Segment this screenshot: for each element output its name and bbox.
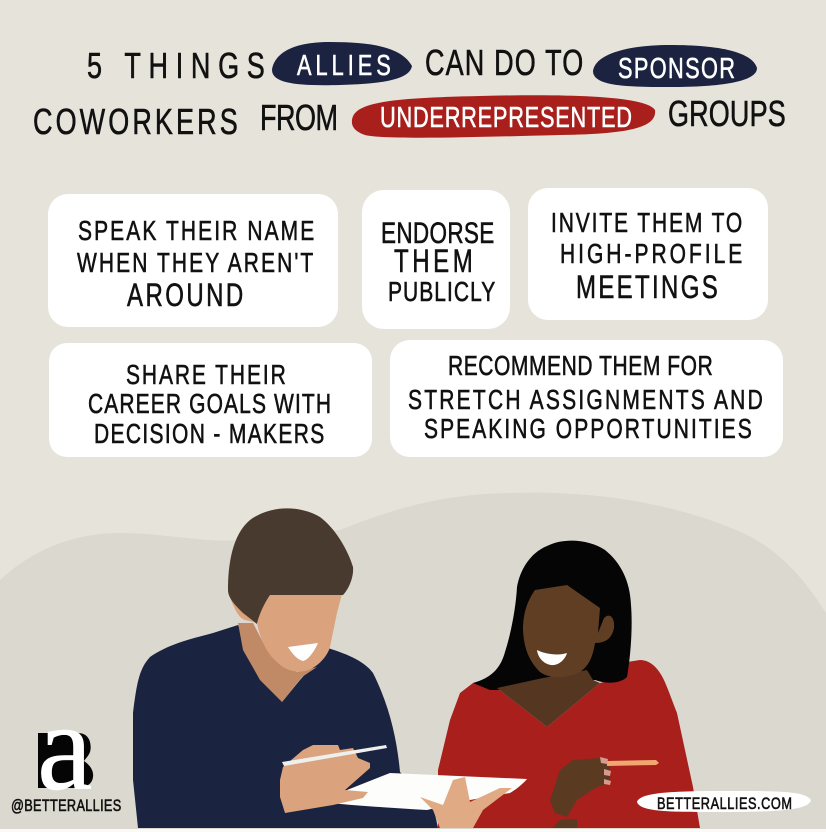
card: speak their name: WHEN THEY AREN'T bbox=[77, 248, 313, 279]
pill: allies bbox=[272, 42, 412, 85]
woman sweater bbox=[438, 660, 700, 828]
website pill: BETTERALLIES.COM bbox=[657, 794, 792, 814]
man hair bbox=[228, 508, 353, 624]
card: invite them: HIGH-PROFILE bbox=[560, 239, 742, 270]
title bbox=[33, 42, 786, 142]
man face bbox=[228, 575, 343, 672]
woman face bbox=[523, 585, 614, 677]
pill: sponsor: SPONSOR bbox=[618, 53, 735, 85]
man mouth bbox=[288, 643, 318, 661]
title line 1: 5 THINGS bbox=[87, 45, 265, 86]
title line 2: COWORKERS bbox=[33, 101, 238, 142]
card: speak their name: SPEAK THEIR NAME bbox=[78, 216, 314, 247]
pill: allies: ALLIES bbox=[297, 50, 391, 82]
website pill bbox=[637, 791, 811, 814]
title line 1: CAN DO TO bbox=[425, 42, 583, 83]
woman hair bbox=[473, 541, 632, 690]
card: recommend them: RECOMMEND THEM FOR bbox=[448, 351, 713, 382]
man's right hand and pen bbox=[280, 745, 387, 813]
pill: underrepresented: UNDERREPRESENTED bbox=[380, 102, 632, 134]
woman hand bbox=[550, 758, 610, 828]
pen bbox=[282, 745, 387, 766]
paper sheet bbox=[330, 773, 527, 810]
card: endorse them publicly bbox=[362, 190, 510, 329]
illustration: woman bbox=[438, 541, 700, 828]
pencil bbox=[607, 760, 659, 766]
illustration: man bbox=[133, 508, 438, 828]
card: recommend them: SPEAKING OPPORTUNITIES bbox=[424, 414, 752, 445]
card: endorse them publicly: THEM bbox=[394, 243, 473, 279]
man shirt bbox=[133, 625, 438, 828]
card: recommend them: STRETCH ASSIGNMENTS AND bbox=[408, 385, 763, 416]
man's lower hand bbox=[420, 777, 512, 828]
card: endorse them publicly: PUBLICLY bbox=[388, 277, 495, 308]
card: share career goals bbox=[49, 343, 372, 457]
card: share career goals: DECISION - MAKERS bbox=[94, 419, 324, 450]
title line 1 bbox=[87, 42, 757, 87]
woman neck bbox=[497, 670, 600, 727]
card: invite them: MEETINGS bbox=[576, 269, 718, 305]
title line 2: GROUPS bbox=[668, 93, 786, 134]
title line 2 bbox=[33, 93, 786, 142]
card: endorse them publicly: ENDORSE bbox=[381, 216, 494, 250]
logo: a bbox=[37, 679, 92, 817]
card: speak their name: AROUND bbox=[127, 277, 243, 313]
man neck bbox=[238, 623, 317, 702]
card: speak their name bbox=[48, 194, 338, 327]
woman nails bbox=[600, 757, 611, 785]
card: invite them: INVITE THEM TO bbox=[551, 208, 742, 239]
card: share career goals: SHARE THEIR bbox=[126, 360, 286, 391]
card: invite them bbox=[528, 188, 768, 320]
handle: @BETTERALLIES bbox=[11, 796, 121, 816]
pill: sponsor bbox=[593, 45, 757, 87]
background hills bbox=[0, 493, 826, 829]
card: share career goals: CAREER GOALS WITH bbox=[88, 389, 331, 420]
woman mouth bbox=[537, 650, 567, 665]
title line 2: FROM bbox=[260, 97, 338, 138]
pill: underrepresented bbox=[352, 95, 655, 138]
card: recommend them bbox=[390, 340, 783, 457]
